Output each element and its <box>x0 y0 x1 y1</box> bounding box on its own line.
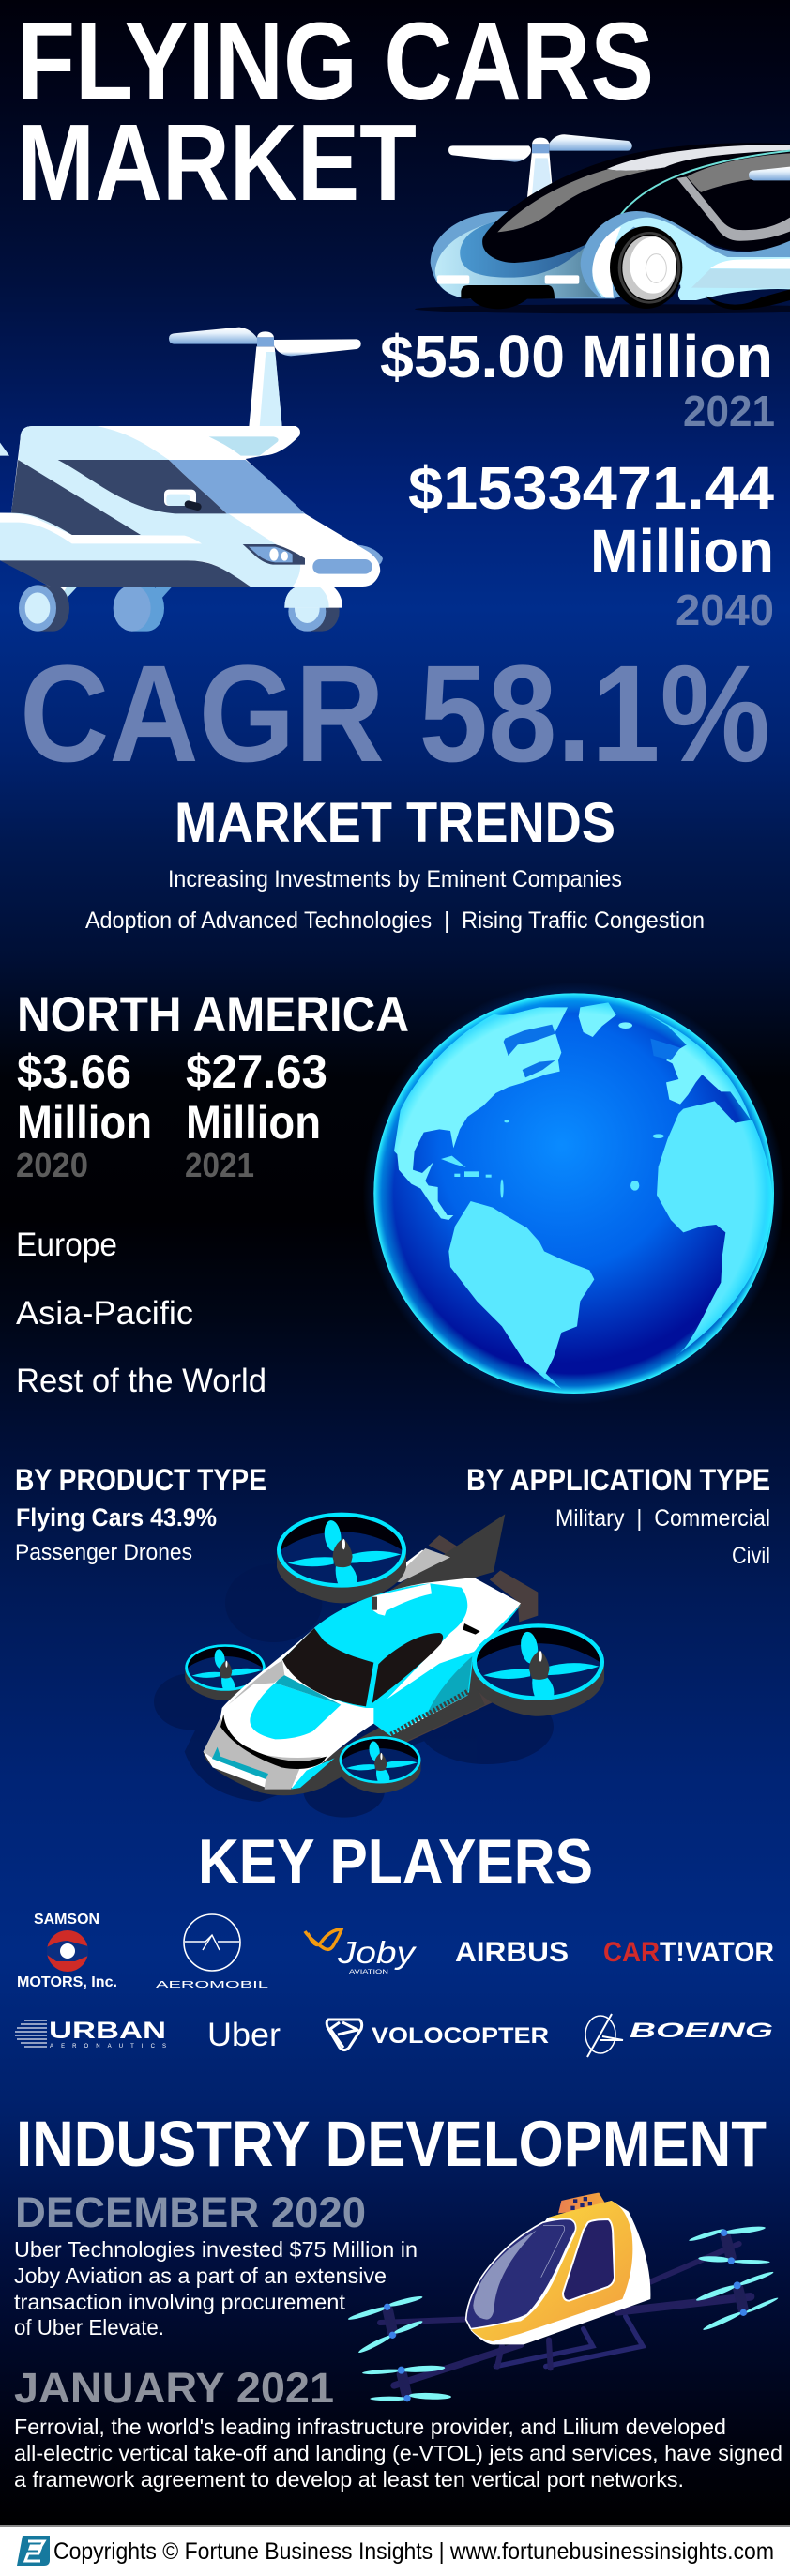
development: December 2020: transaction involving procurement <box>14 2290 346 2314</box>
illustration: white flying van left <box>0 328 383 632</box>
logo: Urban Aeronautics: AERONAUTICS <box>50 2044 166 2050</box>
illustration: drone car <box>154 1513 604 1818</box>
by product type: BY PRODUCT TYPE <box>15 1463 266 1497</box>
development: December 2020 <box>14 2188 418 2340</box>
value 2021: Million <box>186 1096 321 1149</box>
value 2020 <box>16 1045 152 1184</box>
regional panel <box>16 987 409 1399</box>
logo: Cartivator: T!VATOR <box>660 1937 774 1968</box>
logo: Airbus: AIRBUS <box>455 1937 569 1968</box>
market size 2040: Million <box>590 517 774 585</box>
value 2021: $27.63 <box>186 1045 327 1098</box>
development: December 2020: of Uber Elevate. <box>14 2315 164 2340</box>
by product type <box>15 1463 266 1565</box>
other regions: Asia-Pacific <box>16 1295 193 1332</box>
by product type: Flying Cars 43.9% <box>16 1503 217 1532</box>
logo: Volocopter: VOLOCOPTER <box>372 2023 549 2049</box>
market trends <box>85 791 705 934</box>
logo: Cartivator <box>603 1937 774 1968</box>
value 2020: Million <box>17 1096 152 1149</box>
logo: Urban Aeronautics: URBAN <box>49 2018 166 2044</box>
market trends: MARKET TRENDS <box>175 791 615 854</box>
market size 2021: 2021 <box>683 387 775 435</box>
logo: Cartivator: CAR <box>603 1937 660 1968</box>
market size 2021: $55.00 Million <box>380 323 773 390</box>
development: January 2021: JANUARY 2021 <box>14 2364 334 2412</box>
logo: Joby Aviation: Joby <box>337 1935 418 1970</box>
market size 2040 <box>408 454 774 634</box>
key players heading: KEY PLAYERS <box>198 1826 593 1898</box>
logo: Volocopter <box>327 2020 549 2050</box>
logo: Boeing <box>585 2014 773 2057</box>
market size 2040: 2040 <box>676 586 774 634</box>
logo: Joby Aviation: AVIATION <box>349 1970 388 1975</box>
market trends: Increasing Investments by Eminent Companies <box>168 866 622 892</box>
title: MARKET <box>17 101 417 223</box>
icon: Fortune Business Insights logo <box>17 2536 50 2566</box>
development: January 2021: a framework agreement to develop at least ten vertical port networks. <box>14 2467 684 2492</box>
development: January 2021: Ferrovial, the world's leading infrastructure provider, and Lilium developed <box>14 2415 726 2439</box>
other regions <box>16 1227 266 1399</box>
value 2020: $3.66 <box>17 1045 131 1098</box>
title <box>17 0 654 223</box>
development: January 2021: all-electric vertical take-off and landing (e-VTOL) jets and services, have signed <box>14 2441 782 2465</box>
illustration: futuristic car top right <box>415 134 790 313</box>
market size 2040: $1533471.44 <box>408 454 774 522</box>
value 2021 <box>185 1045 327 1184</box>
icon: globe <box>363 983 785 1405</box>
logo: Joby Aviation <box>305 1929 418 1975</box>
other regions: Europe <box>16 1227 117 1263</box>
value 2021: 2021 <box>185 1146 254 1184</box>
logo: AeroMobil <box>156 1914 269 1990</box>
by application type: Civil <box>732 1543 770 1569</box>
development: January 2021 <box>14 2364 782 2492</box>
region heading: NORTH AMERICA <box>17 987 409 1043</box>
by application type <box>466 1463 770 1569</box>
market size 2021 <box>380 323 775 435</box>
development: December 2020: Uber Technologies invested $75 Million in <box>14 2237 418 2262</box>
development: December 2020: Joby Aviation as a part of an extensive <box>14 2264 387 2288</box>
development: December 2020: DECEMBER 2020 <box>15 2188 366 2236</box>
logo: Samson Motors: MOTORS, Inc. <box>17 1974 117 1990</box>
logo: AeroMobil: AEROMOBIL <box>156 1980 269 1990</box>
value 2020: 2020 <box>16 1146 88 1184</box>
logo: Samson Motors <box>17 1912 117 1990</box>
logo: Samson Motors: SAMSON <box>34 1912 99 1928</box>
by product type: Passenger Drones <box>15 1540 192 1565</box>
logo: Urban Aeronautics <box>15 2018 166 2050</box>
logo: Uber: Uber <box>207 2017 281 2053</box>
by application type: Military | Commercial <box>555 1505 770 1532</box>
footer <box>0 2525 790 2576</box>
logo: Boeing: BOEING <box>630 2019 773 2042</box>
title: FLYING CARS <box>17 0 654 124</box>
illustration: air taxi <box>347 2193 779 2401</box>
other regions: Rest of the World <box>16 1363 266 1399</box>
market trends: Adoption of Advanced Technologies | Rising Traffic Congestion <box>85 907 705 934</box>
